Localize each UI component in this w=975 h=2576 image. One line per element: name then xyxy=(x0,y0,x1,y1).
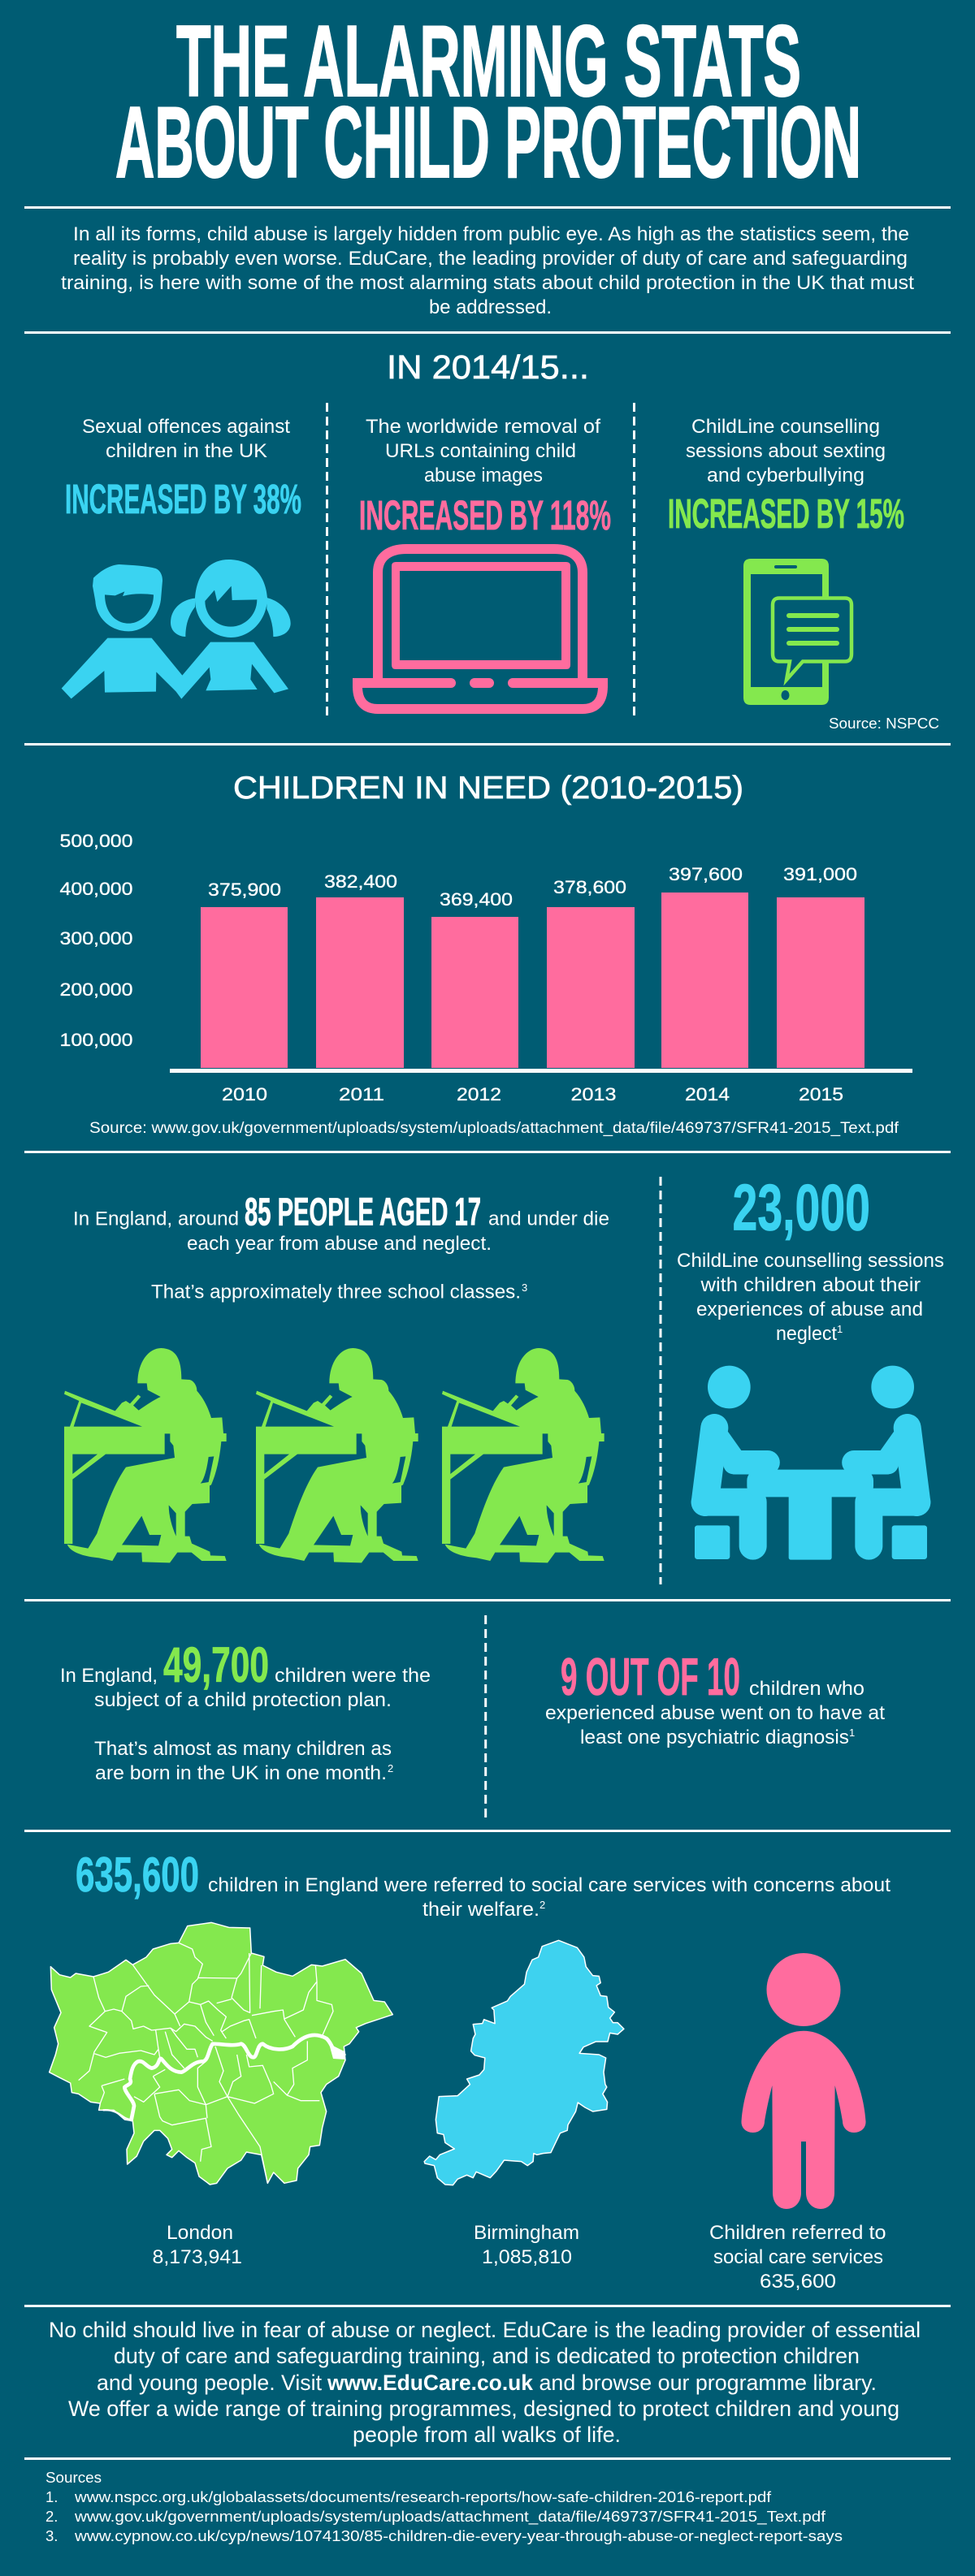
y axis labels: 400,000 xyxy=(60,879,133,899)
value labels: 397,600 xyxy=(669,864,743,884)
text: sexual offences: children in the UK xyxy=(106,440,267,462)
text: ChildLine sexting: and cyberbullying xyxy=(707,465,864,486)
panel: sexual offences xyxy=(62,416,301,699)
y axis labels: 200,000 xyxy=(60,979,133,1000)
text: ChildLine sessions xyxy=(677,1250,944,1345)
text: 85 people aged 17 xyxy=(73,1191,609,1303)
text: 85 people aged 17: 85 PEOPLE AGED 17 xyxy=(245,1191,481,1234)
panel: 49,700: In England, xyxy=(60,1665,158,1687)
bars xyxy=(201,893,864,1068)
closing text: and browse our programme library. xyxy=(540,2371,877,2395)
intro text: be addressed. xyxy=(429,296,552,318)
text: ChildLine sessions: neglect xyxy=(776,1323,837,1345)
map: Birmingham xyxy=(424,1940,624,2185)
text: ChildLine sessions: with children about their xyxy=(700,1274,921,1296)
panel: 49,700: children were the xyxy=(275,1665,431,1687)
x axis labels xyxy=(222,1084,843,1104)
text: URL removal: URLs containing child xyxy=(385,440,576,462)
text: 85 people aged 17: That’s approximately three school classes. xyxy=(151,1282,521,1303)
stat: 23,000: 23,000 xyxy=(733,1171,870,1244)
text: 85 people aged 17: each year from abuse and neglect. xyxy=(187,1233,492,1255)
source: gov.uk: Source: www.gov.uk/government/uploads/system/uploads/attachment_data/file/469737/SFR41-2015_Text.pdf xyxy=(89,1120,899,1137)
closing text: No child should live in fear of abuse or neglect. EduCare is the leading provider of essential xyxy=(49,2318,921,2342)
stat: 9 out of 10: 9 OUT OF 10 xyxy=(561,1647,740,1706)
text: ChildLine sexting: sessions about sexting xyxy=(686,440,886,462)
heading: children in need: CHILDREN IN NEED (2010-2015) xyxy=(233,771,743,806)
panel: 85 people xyxy=(64,1191,609,1562)
value labels: 369,400 xyxy=(440,889,513,910)
icon: laptop xyxy=(353,549,608,709)
label: Birmingham: Birmingham xyxy=(474,2222,579,2244)
closing text: people from all walks of life. xyxy=(353,2423,621,2447)
icon: phone with chat bubble xyxy=(743,559,852,705)
sources list: 3. xyxy=(46,2527,58,2544)
title xyxy=(115,6,861,199)
stat: 635,600: 635,600 xyxy=(76,1848,199,1902)
value labels: 378,600 xyxy=(553,877,626,897)
text: ChildLine sexting: ChildLine counselling xyxy=(691,416,880,438)
panel: 23,000 sessions xyxy=(677,1171,944,1560)
sources list: www.nspcc.org.uk/globalassets/documents/research-reports/how-safe-children-2016-report.pdf xyxy=(74,2488,772,2505)
y axis labels: 300,000 xyxy=(60,928,133,949)
stat: increased by 38%: INCREASED BY 38% xyxy=(65,476,301,522)
intro text: In all its forms, child abuse is largely hidden from public eye. As high as the statistics seem, the xyxy=(73,223,909,245)
value labels xyxy=(208,864,857,910)
panel: 635,600 heading: 2 xyxy=(540,1899,545,1911)
value labels: 382,400 xyxy=(324,871,397,892)
label: children referred: Children referred to xyxy=(709,2222,886,2244)
intro text: training, is here with some of the most alarming stats about child protection in the UK that must xyxy=(61,272,914,294)
panel: 49,700: are born in the UK in one month. xyxy=(95,1762,387,1784)
panel: 49,700: subject of a child protection plan. xyxy=(94,1689,392,1711)
panel: 9 out of 10: experienced abuse went on to have at xyxy=(545,1702,885,1724)
panel: 9 out of 10: children who xyxy=(749,1678,864,1700)
label: Birmingham xyxy=(474,2222,579,2268)
closing text: duty of care and safeguarding training, and is dedicated to protection children xyxy=(114,2344,860,2368)
closing text: We offer a wide range of training programmes, designed to protect children and young xyxy=(68,2397,899,2421)
panel: 49,700 xyxy=(60,1637,431,1784)
text: 85 people aged 17: In England, around xyxy=(73,1208,239,1230)
text: sexual offences xyxy=(82,416,290,462)
icon: two people at table xyxy=(695,1366,927,1560)
sources list: 1. xyxy=(46,2488,58,2505)
label: children referred: social care services xyxy=(713,2246,883,2268)
text: URL removal xyxy=(366,416,600,486)
text: 85 people aged 17: and under die xyxy=(488,1208,609,1230)
x axis labels: 2013 xyxy=(570,1084,616,1104)
sources list: www.cypnow.co.uk/cyp/news/1074130/85-children-die-every-year-through-abuse-or-neglect-report-says xyxy=(74,2527,843,2544)
heading: in 2014/15: IN 2014/15... xyxy=(387,348,589,386)
text: URL removal: abuse images xyxy=(424,465,543,486)
label: London: 8,173,941 xyxy=(153,2246,242,2268)
stat: increased by 118%: INCREASED BY 118% xyxy=(359,492,611,538)
value labels: 375,900 xyxy=(208,880,281,900)
text: URL removal: The worldwide removal of xyxy=(366,416,600,438)
bar chart: children in need xyxy=(60,831,912,1104)
y axis labels xyxy=(60,831,133,1050)
text: ChildLine sessions: experiences of abuse and xyxy=(696,1299,923,1320)
x axis labels: 2011 xyxy=(339,1084,384,1104)
intro text xyxy=(61,223,914,318)
icon: boy and girl xyxy=(62,560,291,699)
text: sexual offences: Sexual offences against xyxy=(82,416,290,438)
label: London xyxy=(153,2222,242,2268)
icon: three students at desks xyxy=(64,1348,604,1562)
stat: 49,700: 49,700 xyxy=(163,1637,269,1692)
panel: 635,600 heading: their welfare. xyxy=(422,1899,540,1921)
panel: ChildLine sexting xyxy=(668,416,904,705)
closing text xyxy=(49,2318,921,2447)
panel: 9 out of 10: least one psychiatric diagnosis xyxy=(580,1727,849,1748)
x axis labels: 2012 xyxy=(457,1084,501,1104)
label: London: London xyxy=(167,2222,233,2244)
panel: 49,700: That’s almost as many children as xyxy=(94,1738,392,1760)
text: 85 people aged 17: 3 xyxy=(522,1282,527,1294)
icon: child figure xyxy=(741,1953,866,2209)
sources list: Sources xyxy=(46,2469,102,2486)
panel: 635,600 heading: children in England were referred to social care services with concerns about xyxy=(208,1874,890,1896)
label: children referred xyxy=(709,2222,886,2293)
value labels: 391,000 xyxy=(783,864,857,884)
x axis labels: 2010 xyxy=(222,1084,267,1104)
text: ChildLine sessions: ChildLine counselling sessions xyxy=(677,1250,944,1272)
sources list: www.gov.uk/government/uploads/system/uploads/attachment_data/file/469737/SFR41-2015_Text.pdf xyxy=(74,2508,826,2526)
y axis labels: 500,000 xyxy=(60,831,133,851)
label: children referred: 635,600 xyxy=(760,2271,836,2293)
label: Birmingham: 1,085,810 xyxy=(482,2246,572,2268)
panel: 635,600 heading xyxy=(76,1848,890,1921)
closing text: and young people. Visit xyxy=(97,2371,323,2395)
text: ChildLine sexting xyxy=(686,416,886,486)
x axis labels: 2015 xyxy=(799,1084,843,1104)
map: London xyxy=(50,1922,392,2185)
text: ChildLine sessions: 1 xyxy=(837,1323,843,1335)
closing text: www.EduCare.co.uk xyxy=(327,2371,533,2395)
panel: URL removal xyxy=(353,416,611,709)
sources list: 2. xyxy=(46,2508,58,2525)
panel: 9 out of 10: 1 xyxy=(849,1727,855,1739)
sources list xyxy=(46,2469,843,2544)
x axis labels: 2014 xyxy=(685,1084,730,1104)
y axis labels: 100,000 xyxy=(60,1030,133,1050)
panel: 49,700: 2 xyxy=(388,1762,393,1774)
panel: 9 out of 10 xyxy=(545,1647,885,1748)
intro text: reality is probably even worse. EduCare, the leading provider of duty of care and safeguarding xyxy=(73,248,908,270)
source: NSPCC: Source: NSPCC xyxy=(829,715,939,732)
